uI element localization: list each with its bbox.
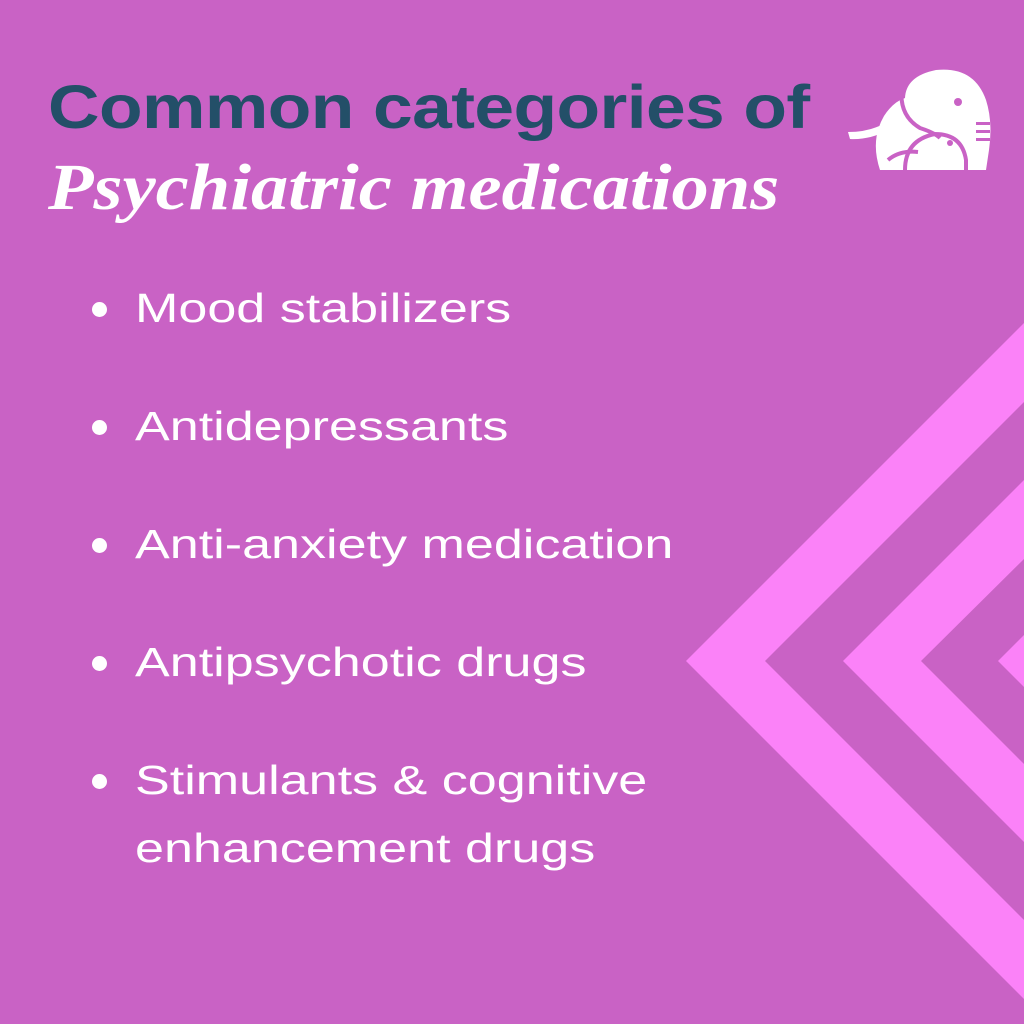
bullet: mood stabilizers: Mood stabilizers (135, 285, 511, 331)
bullet: antipsychotic: Antipsychotic drugs (135, 639, 587, 685)
bullet: stimulants: enhancement drugs (135, 825, 595, 871)
bullet: stimulants: Stimulants & cognitive (135, 757, 647, 803)
title line 1: Common categories of (48, 73, 810, 141)
bullet: stimulants (92, 757, 647, 871)
bullet: anti-anxiety: Anti-anxiety medication (135, 521, 673, 567)
icon: elephant (848, 70, 990, 170)
bullet: antidepressants: Antidepressants (135, 403, 508, 449)
title line 2: Psychiatric medications (48, 151, 779, 224)
